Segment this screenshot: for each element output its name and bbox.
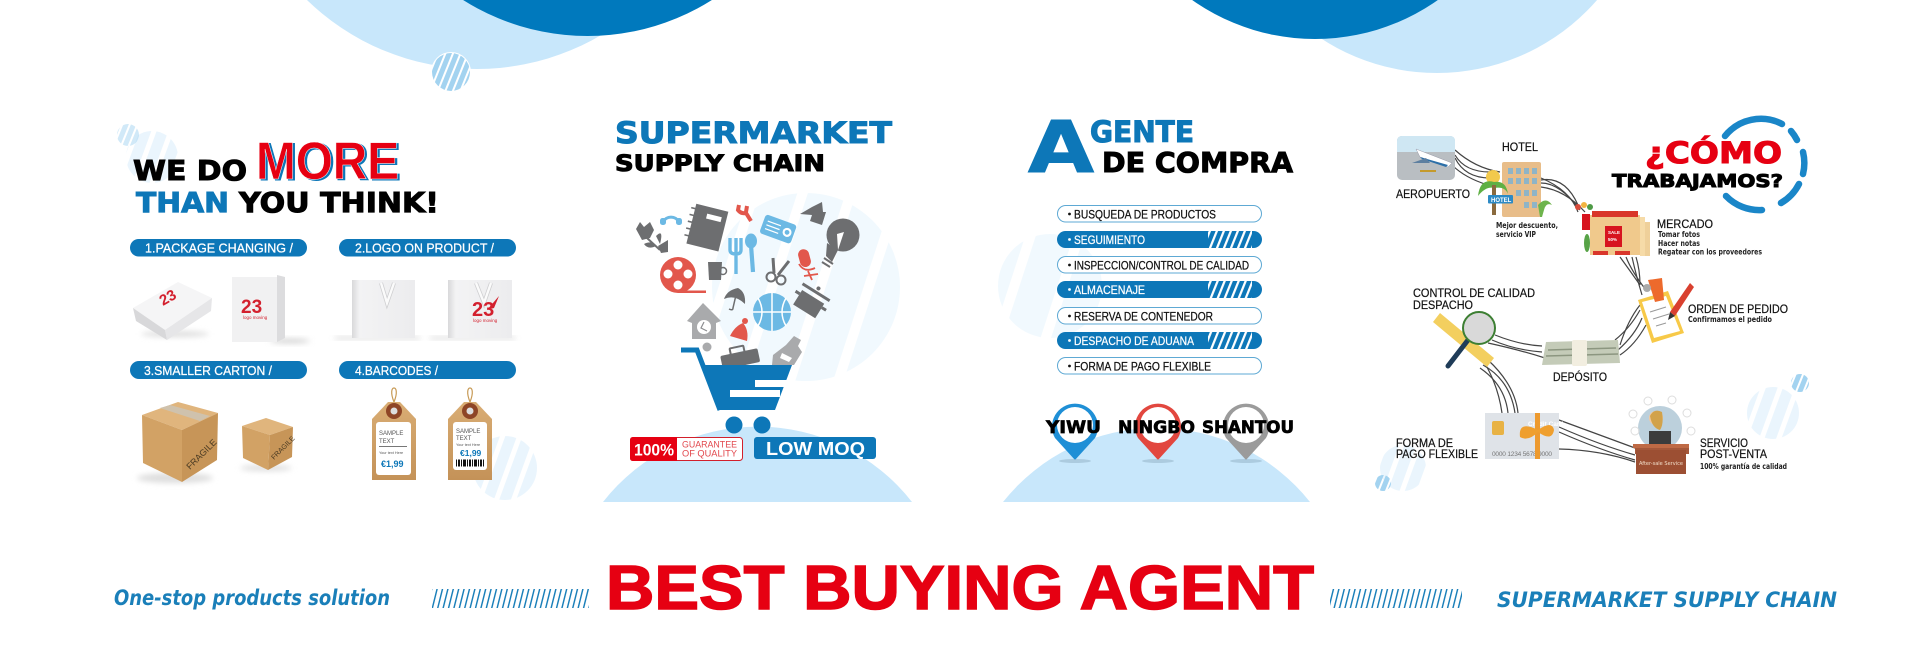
- icon: ruler and magnifier: [1433, 312, 1495, 367]
- text: forma de pago: [1396, 438, 1478, 461]
- text: servicio post-venta: SERVICIO: [1700, 438, 1748, 450]
- label: barcodes: 4.BARCODES /: [355, 363, 438, 378]
- icon: yiwu pin: [1052, 404, 1098, 463]
- icon: flat white gift box: [133, 282, 212, 340]
- icon: price tag with barcode: €1,99: [460, 448, 482, 458]
- icon: price tag: [372, 388, 416, 480]
- icon: hotel: [1478, 162, 1552, 217]
- heading: we do more: [133, 132, 401, 192]
- icon: cuckoo clock: [687, 303, 721, 352]
- icon: price tag with barcode: TEXT: [456, 436, 472, 442]
- hatch band left: [432, 589, 589, 608]
- label: hotel: HOTEL: [1502, 142, 1539, 154]
- icon: microphone: [797, 248, 818, 280]
- icon: basketball: [753, 293, 791, 331]
- item: almacenaje: [1057, 281, 1262, 298]
- heading: we do more: WE DO: [133, 154, 247, 187]
- text: servicio post-venta: 100% garantía de calidad: [1700, 462, 1787, 471]
- item: busqueda de productos: [1058, 206, 1262, 222]
- text: mercado: Tomar fotos: [1658, 230, 1700, 239]
- item: forma de pago flexible: FORMA DE PAGO FLEXIBLE: [1074, 360, 1211, 374]
- text: servicio post-venta: POST-VENTA: [1700, 449, 1767, 461]
- icon: dashed ring: [1725, 119, 1804, 210]
- panel: we do more than you think: [117, 124, 537, 500]
- text: forma de pago: PAGO FLEXIBLE: [1396, 449, 1478, 461]
- icon: market: SALE: [1608, 230, 1620, 235]
- icon: plain shopping bag: [335, 280, 420, 339]
- icon: ningbo pin: [1135, 404, 1181, 463]
- icon: pine tree: [800, 202, 826, 225]
- text: hotel note: servicio VIP: [1496, 230, 1536, 239]
- heading: than you think: YOU THINK!: [238, 186, 439, 219]
- text: hotel note: Mejor descuento,: [1496, 221, 1558, 230]
- item: almacenaje: ALMACENAJE: [1074, 283, 1145, 297]
- top left decorative circles: [233, 0, 820, 92]
- icon: customer service desk: After-sale Service: [1639, 461, 1684, 467]
- badge: low moq: LOW MOQ: [766, 439, 865, 459]
- item: despacho de aduana: DESPACHO DE ADUANA: [1074, 334, 1194, 348]
- icon: price tag: SAMPLE: [379, 431, 403, 437]
- label: aeropuerto: AEROPUERTO: [1396, 189, 1470, 201]
- heading: supermarket: SUPERMARKET: [615, 116, 892, 150]
- icon: hotel: HOTEL: [1491, 198, 1512, 204]
- hatch band right: [1330, 589, 1462, 608]
- text: servicio post-venta: [1700, 438, 1787, 471]
- icon: branded shopping bag: [430, 280, 515, 339]
- icon: light bulb: [822, 218, 860, 267]
- icon: flat white gift box: 23: [156, 286, 179, 309]
- label: deposito: DEPÓSITO: [1553, 371, 1607, 384]
- icon: briefcase: [720, 346, 760, 370]
- icon: price tag with barcode: SAMPLE: [456, 429, 480, 435]
- icon: scissors: [766, 258, 789, 284]
- label: smaller carton: 3.SMALLER CARTON /: [144, 363, 272, 378]
- badge: low moq: [754, 437, 876, 459]
- icon: headphones: [660, 217, 682, 225]
- label: shantou: SHANTOU: [1202, 418, 1294, 438]
- icon: film reel: [660, 257, 706, 293]
- icon: money roll: [1542, 340, 1620, 366]
- text: mercado: MERCADO: [1657, 219, 1713, 231]
- panel background stripes: [117, 124, 537, 500]
- item: inspeccion: INSPECCION/CONTROL DE CALIDAD: [1074, 258, 1249, 272]
- icon: large carton: FRAGILE: [184, 437, 219, 471]
- heading: agente de compra: A: [1028, 106, 1094, 189]
- label: package changing: 1.PACKAGE CHANGING /: [145, 240, 293, 256]
- icon: clipboard and pencil: [1638, 278, 1694, 343]
- pale striped background circle: [712, 193, 900, 381]
- footer slogan: one-stop products solution: One-stop products solution: [114, 586, 390, 610]
- icon: small carton: FRAGILE: [270, 435, 297, 461]
- icon: cooking pot: [789, 277, 835, 321]
- icon: price tag: Your text Here: [379, 451, 403, 455]
- icon: winter hat: [730, 318, 748, 341]
- badge: guarantee of quality: 100%: [634, 442, 674, 460]
- text: orden de pedido: Confirmamos el pedido: [1688, 315, 1772, 324]
- icon: standing white box: logo moving: [243, 315, 268, 320]
- text: mercado: Regatear con los proveedores: [1658, 248, 1762, 256]
- icon: branded shopping bag: 23: [472, 299, 494, 321]
- icon: market: [1575, 202, 1650, 256]
- label: yiwu: YIWU: [1045, 418, 1101, 438]
- icon: notebook: [683, 203, 728, 251]
- blue hill: [1003, 428, 1310, 502]
- heading: we do more: MORE: [258, 133, 401, 192]
- list: services: [1057, 206, 1262, 374]
- item: seguimiento: [1057, 231, 1262, 248]
- heading: than you think: THAN: [136, 186, 229, 219]
- heading: than you think: [136, 186, 439, 219]
- icon: branded shopping bag: logo moving: [473, 318, 498, 323]
- heading: agente de compra: GENTE: [1090, 115, 1194, 149]
- footer slogan: supermarket supply chain: SUPERMARKET SUPPLY CHAIN: [1497, 588, 1837, 612]
- badge: guarantee of quality: OF QUALITY: [682, 448, 737, 458]
- item: reserva de contenedor: RESERVA DE CONTENEDOR: [1074, 310, 1213, 324]
- item: reserva de contenedor: [1058, 308, 1262, 324]
- icon: credit card: 0000 1234 5678 9000: [1492, 451, 1552, 458]
- icon: price tag: TEXT: [379, 439, 395, 445]
- icon: airport: [1397, 136, 1455, 180]
- label: barcodes: [339, 361, 516, 379]
- text: hotel note: [1496, 221, 1558, 239]
- icon: credit card: [1485, 413, 1563, 459]
- heading: como: ¿CÓMO: [1645, 136, 1782, 170]
- icon: customer service desk: [1629, 396, 1695, 474]
- panel background stripes: [1375, 374, 1809, 491]
- main title: best buying agent: BEST BUYING AGENT: [606, 554, 1314, 623]
- panel: agente de compra: [998, 106, 1310, 502]
- text: control de calidad: [1413, 288, 1535, 312]
- icon: price tag: €1,99: [381, 459, 404, 469]
- icon: tulip in pot: [636, 222, 668, 253]
- icon: standing white box: [232, 275, 310, 343]
- label: ningbo: NINGBO: [1118, 418, 1195, 438]
- pale striped background circle: [998, 234, 1102, 338]
- item: seguimiento: SEGUIMIENTO: [1074, 233, 1145, 247]
- icon: umbrella: [724, 288, 745, 310]
- text: orden de pedido: [1688, 304, 1788, 324]
- icon: small carton: [240, 418, 297, 471]
- text: control de calidad: DESPACHO: [1413, 300, 1473, 312]
- label: logo on product: 2.LOGO ON PRODUCT /: [355, 240, 494, 256]
- heading: we do more: MORE: [256, 132, 399, 191]
- icon: radio: [759, 214, 797, 244]
- panel: supermarket supply chain: [603, 116, 912, 502]
- label: smaller carton: [130, 361, 307, 379]
- connecting wires: [1452, 150, 1646, 462]
- icon: market: 50%: [1608, 237, 1617, 242]
- badge: guarantee of quality: GUARANTEE: [682, 440, 737, 450]
- heading: supply chain: SUPPLY CHAIN: [615, 152, 825, 177]
- icon: bottle: [772, 336, 802, 365]
- icon: credit card: Credit Card: [1528, 421, 1563, 428]
- icon: fork: [730, 238, 741, 274]
- text: mercado: Hacer notas: [1658, 239, 1700, 248]
- item: forma de pago flexible: [1058, 358, 1262, 374]
- item: busqueda de productos: BUSQUEDA DE PRODUCTOS: [1074, 208, 1216, 222]
- icon: wrench: [738, 205, 751, 221]
- icon: mug: [708, 262, 726, 280]
- icon: shopping cart: [681, 350, 795, 434]
- text: forma de pago: FORMA DE: [1396, 438, 1453, 450]
- heading: trabajamos: TRABAJAMOS?: [1612, 171, 1783, 192]
- icon: large carton: [137, 402, 219, 483]
- icon: standing white box: 23: [241, 297, 262, 318]
- heading: agente de compra: [1028, 106, 1293, 189]
- badge: guarantee of quality: [630, 437, 742, 461]
- top right decorative circles: [1102, 0, 1649, 73]
- icon: price tag with barcode: Your text Here: [456, 443, 480, 447]
- text: mercado: [1657, 219, 1762, 256]
- heading: agente de compra: DE COMPRA: [1102, 146, 1293, 179]
- item: despacho de aduana: [1057, 332, 1262, 349]
- panel: como trabajamos: [1375, 119, 1809, 491]
- icon: shantou pin: [1223, 404, 1269, 463]
- text: control de calidad: CONTROL DE CALIDAD: [1413, 288, 1535, 300]
- icon: price tag with barcode: [448, 388, 492, 480]
- text: orden de pedido: ORDEN DE PEDIDO: [1688, 304, 1788, 316]
- blue hill: [603, 427, 912, 502]
- icon: spoon: [745, 234, 757, 272]
